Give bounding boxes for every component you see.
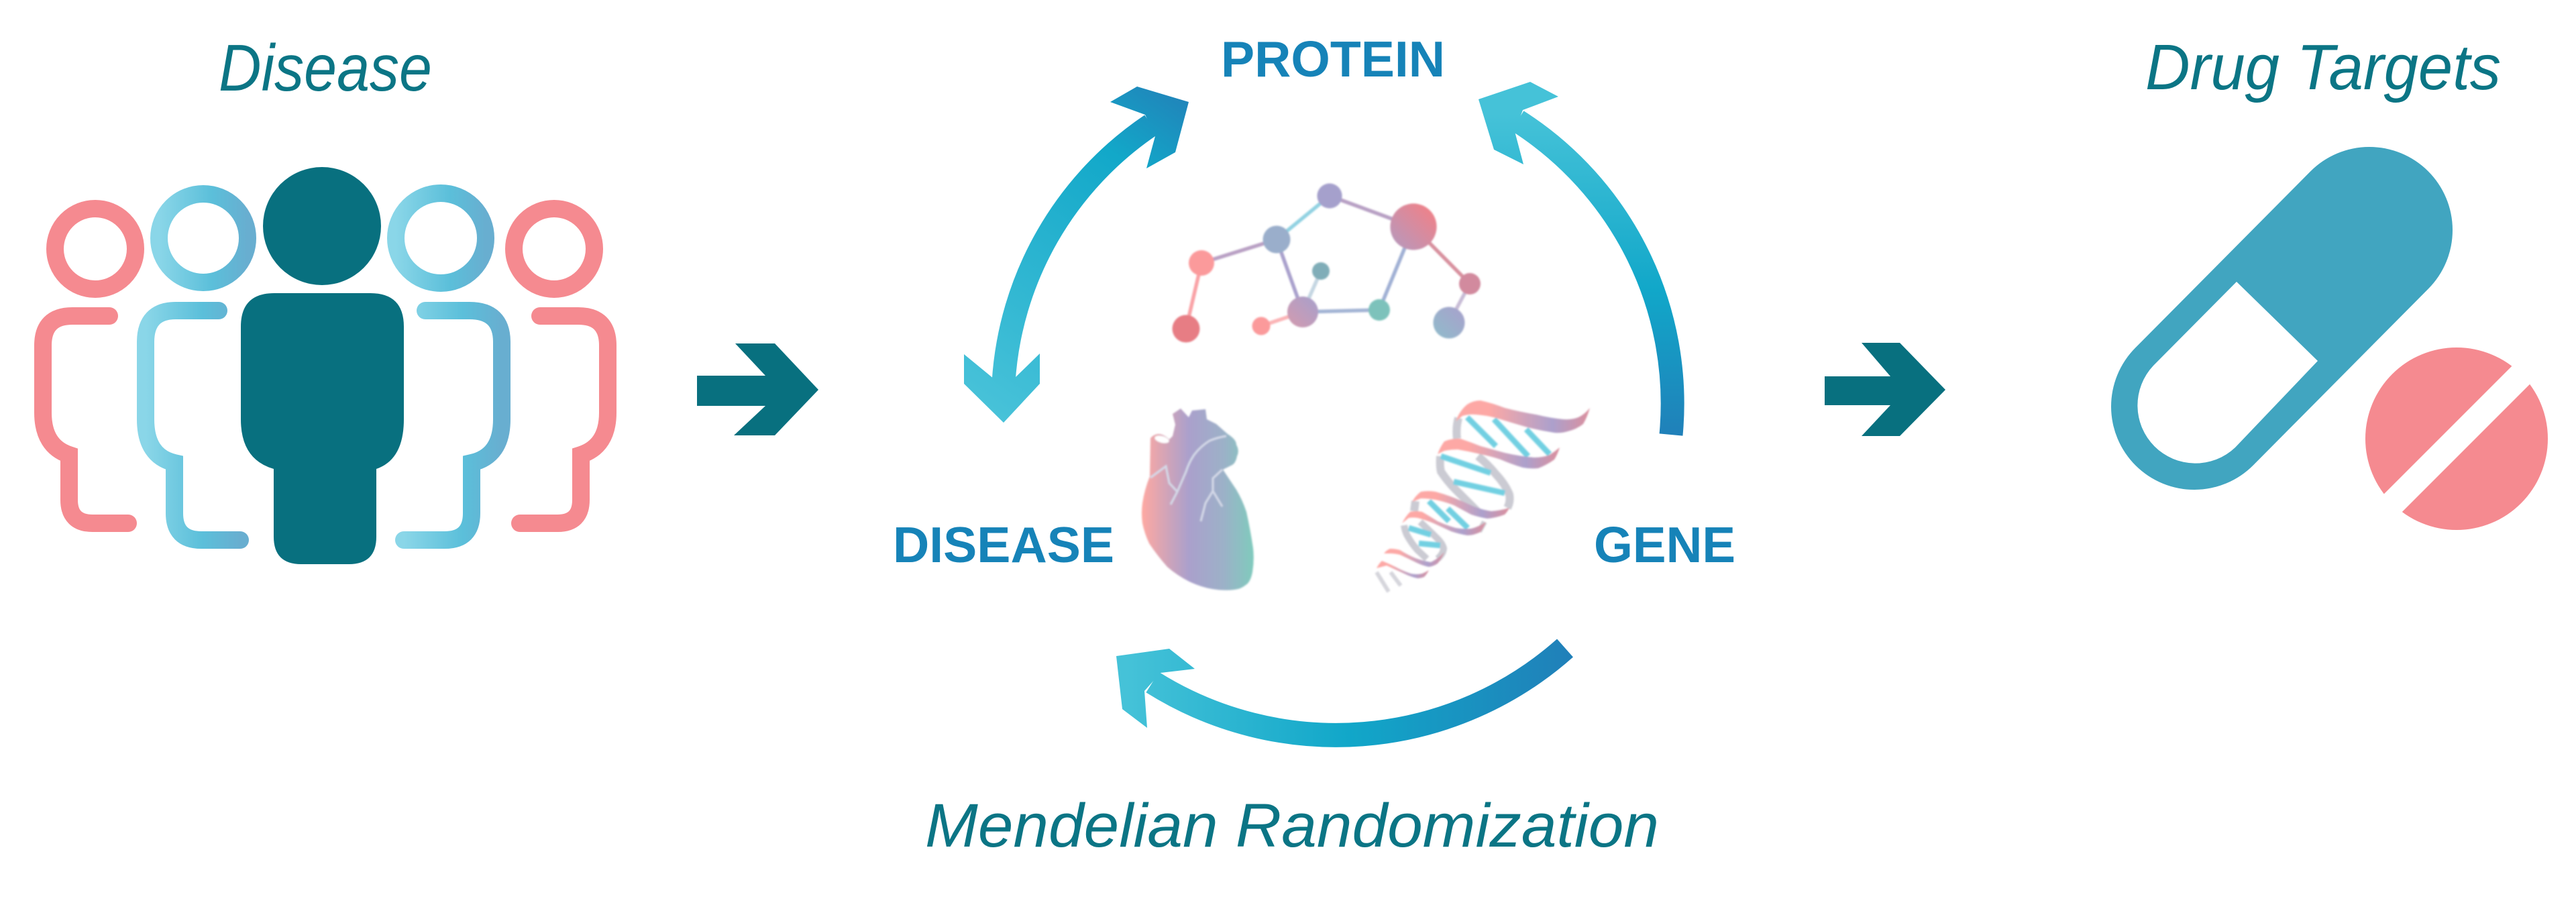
icon: heart [1142, 409, 1254, 590]
outer right person [514, 209, 608, 523]
arrow: protein and disease double-headed [964, 87, 1189, 423]
outer left person [43, 209, 136, 523]
label: GENE: GENE [1594, 517, 1735, 573]
arrow: gene to disease [1116, 648, 1565, 735]
arrow: cycle to drug targets [1825, 343, 1945, 436]
icon: capsule [2137, 230, 2369, 464]
caption: Mendelian Randomization: Mendelian Randomization [925, 792, 1659, 860]
inner right person [396, 193, 502, 540]
heading: Drug Targets: Drug Targets [2145, 32, 2501, 103]
icon: protein molecule [1173, 183, 1481, 342]
arrow: disease to cycle [697, 343, 818, 435]
center person [241, 167, 404, 564]
heading: Disease: Disease [219, 31, 432, 105]
inner left person [146, 194, 248, 540]
icon: DNA helix [1377, 400, 1590, 592]
label: PROTEIN: PROTEIN [1221, 31, 1445, 87]
icon: group of people [43, 167, 608, 564]
label: DISEASE: DISEASE [893, 517, 1114, 573]
icon: tablet [2361, 345, 2551, 535]
arrow: gene to protein [1479, 82, 1672, 435]
